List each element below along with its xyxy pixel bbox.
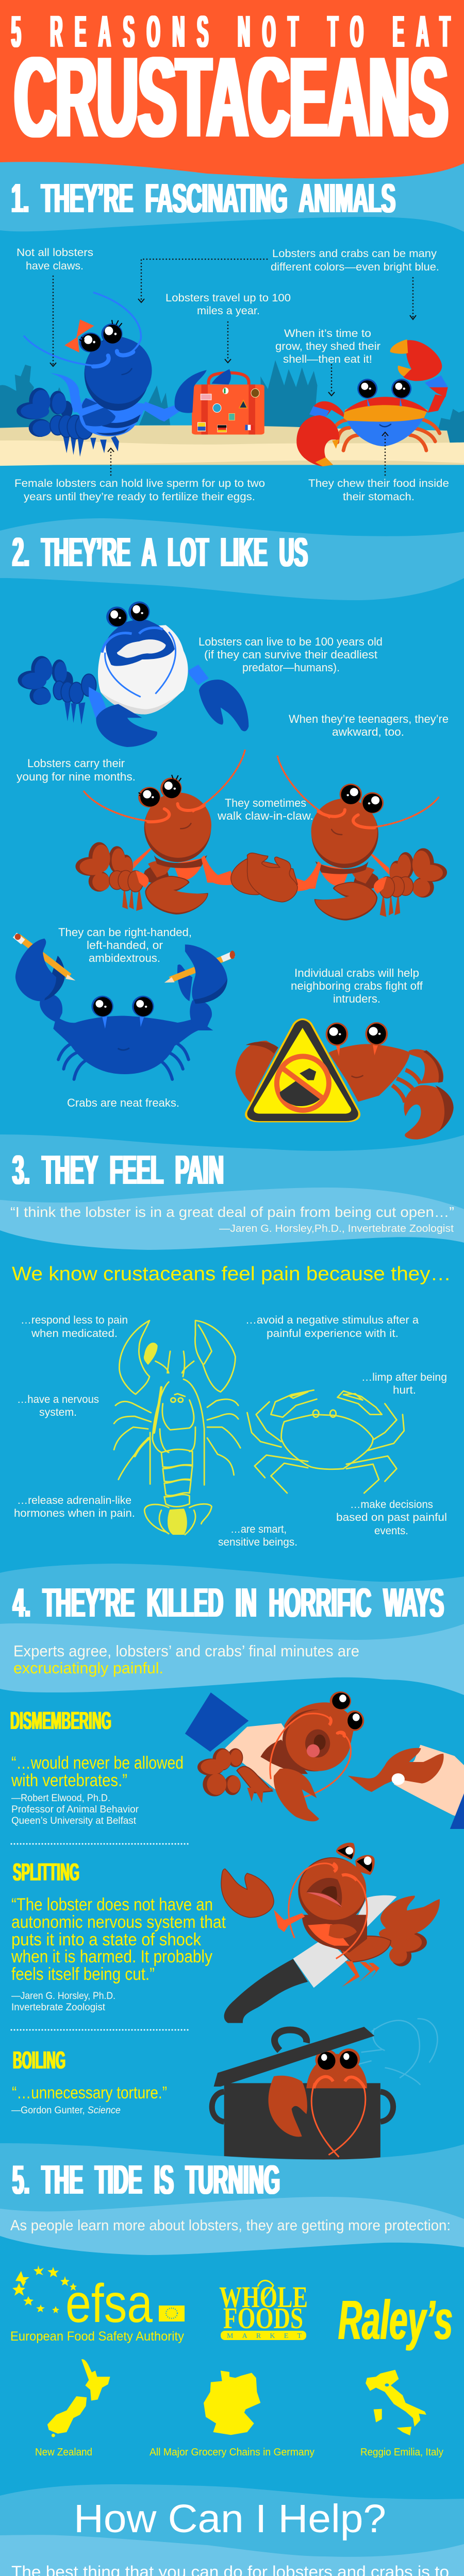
back sand (0, 426, 464, 465)
map labels (35, 2447, 443, 2458)
legs (392, 1070, 420, 1103)
map: Germany (204, 2370, 260, 2435)
text: individual crabs: intruders. (333, 992, 380, 1005)
legs (342, 1961, 379, 1987)
text: travel (165, 292, 291, 317)
dotted pointer: colors (138, 259, 267, 302)
lobster brow marks (314, 2077, 364, 2088)
body (302, 1915, 367, 1953)
quote: would never: “…would never be allowed (11, 1753, 184, 1773)
boiling pot pictogram (280, 1080, 321, 1106)
text: colors: Lobsters and crabs can be many (272, 248, 437, 260)
lobster head (306, 2054, 367, 2088)
left lobster eyes (138, 775, 182, 807)
eyes (330, 1691, 351, 1710)
shell (328, 1044, 410, 1101)
side tail piece (81, 398, 115, 426)
text: handed: left-handed, or (87, 939, 163, 952)
illustration: splitting a lobster (221, 1843, 440, 2023)
text: teenagers: awkward, too. (332, 725, 404, 738)
dotted pointer: shell (328, 365, 335, 396)
text: travel: miles a year. (197, 305, 260, 317)
front sand (0, 440, 464, 466)
maps (47, 2359, 426, 2437)
eyes (102, 1016, 144, 1029)
text: protection: As people learn more about lobsters, they are getting more protection: (10, 2217, 451, 2234)
left pencil (15, 934, 75, 980)
quote: autonomic: feels itself being cut.” (11, 1964, 155, 1984)
text: nervous system (17, 1394, 99, 1418)
quote: would never (11, 1753, 184, 1790)
left raised claw (221, 1869, 274, 1918)
lower claw (274, 1769, 319, 1821)
quote: Horsley: “I think the lobster is in a great deal of pain from being cut open…” (10, 1204, 454, 1220)
quote: autonomic: puts it into a state of shock (11, 1930, 202, 1950)
text: live to 100: predator—humans). (242, 661, 340, 674)
quote: would never: with vertebrates.” (11, 1771, 127, 1790)
efsa wordmark: efsa (65, 2273, 153, 2334)
legs (247, 1788, 274, 1803)
thumb highlight (392, 1773, 405, 1785)
text: claw in claw (217, 796, 313, 822)
text: individual crabs (291, 967, 423, 1005)
text: shedding (275, 328, 380, 365)
footer wave: pale (0, 2535, 464, 2576)
suitcase (192, 384, 264, 434)
eyes (336, 1843, 355, 1860)
legs (58, 1042, 189, 1079)
text: chew: They chew their food inside (308, 478, 449, 489)
right lobster eyes (340, 784, 384, 814)
text: decisions: …make decisions (350, 1499, 433, 1511)
logo: Whole Foods Market (219, 2280, 308, 2340)
smile (352, 1075, 363, 1077)
line drawing: lobster (114, 1320, 240, 1535)
warning sign (245, 1019, 360, 1122)
text: experts agree (13, 1642, 359, 1677)
claws (119, 1320, 150, 1394)
body (153, 1379, 204, 1485)
text: limp (361, 1371, 447, 1396)
pregnant / old blue lobster (18, 601, 248, 747)
segments (53, 674, 96, 704)
blue lobster with bow and suitcase (16, 292, 264, 457)
market: MARKET (227, 2332, 302, 2340)
wave band behind heading 3 (0, 1134, 464, 1226)
map: Italy (366, 2370, 426, 2435)
left arm (309, 401, 345, 419)
text: travel: Lobsters travel up to 100 (165, 292, 291, 304)
heading: how can I help: How Can I Help? (74, 2497, 386, 2541)
knife blade (293, 1937, 348, 1988)
claw lower right (404, 1085, 454, 1140)
small raised limb (51, 373, 83, 413)
antennae (105, 653, 141, 697)
map labels: Reggio Emilia, Italy (360, 2447, 443, 2458)
attribution: Elwood: —Robert Elwood, Ph.D. (11, 1793, 110, 1804)
text: experts agree: Experts agree, lobsters’ and crabs’ final minutes are (13, 1642, 359, 1660)
text: shedding: shell—then eat it! (283, 353, 372, 365)
whole: WHOLE (219, 2280, 308, 2314)
heading: boiling: BOILING (13, 2047, 65, 2074)
shell bands (96, 414, 141, 435)
stickers (198, 387, 259, 432)
head (284, 1702, 355, 1764)
eyes (326, 1023, 348, 1046)
quote: Horsley: —Jaren G. Horsley,Ph.D., Invertebrate Zoologist (219, 1223, 454, 1234)
shell (53, 1016, 213, 1074)
text: chew: their stomach. (343, 491, 415, 503)
right lobster (277, 756, 447, 921)
heading: dismembering: DISMEMBERING (10, 1707, 111, 1735)
coral left (0, 365, 71, 429)
text: carry young: Lobsters carry their (27, 757, 125, 770)
white mustache (117, 639, 166, 658)
title line: 5 reasons not to eat: 5 REASONS NOT TO EAT (11, 6, 450, 57)
crab legs (333, 419, 440, 450)
sleeve left (185, 1692, 248, 1752)
antennae and brows (270, 1714, 330, 1779)
lower shell (347, 418, 423, 446)
text: decisions (336, 1499, 447, 1537)
attribution: Gunter: —Gordon Gunter, Science (11, 2105, 121, 2116)
logo: EFSA (10, 2265, 185, 2344)
text: decisions: events. (374, 1525, 408, 1537)
text: medicated: …respond less to pain (21, 1314, 128, 1326)
divider dots 1 (11, 1843, 189, 1844)
pot handles (212, 2092, 224, 2122)
text: not all lobsters (16, 247, 93, 272)
left lobster (75, 750, 245, 914)
footer wave: how can I help (0, 2484, 464, 2576)
text: carry young (16, 757, 136, 783)
wave band behind heading 4 (0, 1564, 464, 1649)
right pencil (164, 951, 235, 982)
text: medicated: when medicated. (31, 1328, 118, 1340)
knife upper blade (358, 1895, 396, 1927)
yellow subheading: We know crustaceans feel pain because they… (12, 1263, 451, 1285)
smile (118, 1048, 129, 1050)
text: female lobsters: years until they’re ready to fertilize their eggs. (24, 491, 255, 503)
dotted pointer: bright blue (410, 278, 416, 319)
eye drips (335, 1042, 379, 1056)
pot body (224, 2083, 380, 2160)
quote: unnecessary torture: “…unnecessary torture.” (12, 2083, 167, 2102)
mouth (306, 1878, 342, 1907)
text: nervous system: system. (39, 1406, 77, 1418)
red crab with warning sign (235, 1019, 454, 1140)
lobster eyes (316, 2049, 338, 2071)
efsa full name: European Food Safety Authority (10, 2329, 184, 2344)
text: medicated (21, 1314, 128, 1340)
orange title banner (0, 0, 464, 179)
lid (214, 2027, 374, 2087)
attribution: Elwood: Queen’s University at Belfast (11, 1816, 137, 1826)
map labels: New Zealand (35, 2447, 92, 2458)
text: not all lobsters: have claws. (26, 260, 84, 272)
tail (161, 1449, 192, 1506)
text: live to 100: (if they can survive their deadliest (204, 648, 377, 661)
legs (247, 1402, 404, 1493)
dotted pointer: travel (225, 322, 231, 363)
orange shell (343, 402, 428, 421)
text: female lobsters (14, 478, 265, 503)
text: individual crabs: Individual crabs will help (294, 967, 419, 979)
eyes (79, 332, 102, 352)
tail fan highlights (21, 390, 67, 436)
gripping claw (175, 369, 231, 413)
text: individual crabs: neighboring crabs fight off (291, 979, 423, 992)
efsa flag stars (166, 2308, 177, 2318)
dotted pointer: stomach (382, 432, 388, 475)
text: chew (308, 478, 449, 503)
attribution: Horsley (11, 1991, 115, 2013)
pale wave behind experts text (0, 1623, 464, 1695)
severed claw (348, 1748, 444, 1792)
text: carry young: young for nine months. (16, 770, 136, 783)
shell (281, 1414, 373, 1469)
antenna loop (311, 2083, 366, 2157)
dotted pointer: sperm (108, 448, 114, 475)
claws (199, 680, 248, 731)
left claw back finger (44, 956, 65, 1001)
foods: FOODS (223, 2301, 303, 2335)
map labels: All Major Grocery Chains in Germany (150, 2447, 314, 2458)
panel: seafloor scene (0, 360, 464, 466)
text: handed: They can be right-handed, (58, 926, 192, 939)
bow (64, 319, 94, 352)
knife handle (224, 1959, 308, 2023)
tail body (339, 1936, 391, 1962)
text: nervous system: …have a nervous (17, 1394, 99, 1405)
text: adrenalin: …release adrenalin-like (17, 1495, 131, 1506)
dotted pointer: claws (50, 276, 56, 366)
suitcase handle (208, 373, 249, 385)
text: teenagers: When they’re teenagers, they’re (289, 713, 449, 725)
text: teenagers (289, 713, 449, 738)
text: smart (218, 1523, 297, 1548)
efsa flag (159, 2306, 185, 2321)
heading: splitting: SPLITTING (13, 1859, 79, 1886)
lobster couple walking claw in claw (75, 750, 447, 921)
legs (64, 702, 85, 725)
text: adrenalin (14, 1495, 135, 1519)
held claws (231, 859, 297, 895)
text: claw in claw: They sometimes (225, 796, 306, 809)
lower claw (296, 415, 339, 466)
tail fan (197, 1748, 243, 1797)
map: New Zealand (47, 2359, 110, 2437)
claw left (235, 1041, 278, 1104)
quote: Horsley (10, 1204, 454, 1234)
text: live to 100: Lobsters can live to be 100 years old (198, 635, 383, 648)
limb crossing (75, 402, 105, 416)
right hand (394, 1745, 464, 1819)
text: decisions: based on past painful (336, 1512, 447, 1523)
text: avoid stimulus: painful experience with it. (267, 1328, 399, 1340)
seaweed middle (260, 360, 318, 429)
quote: autonomic (11, 1895, 226, 1984)
tail segments (50, 415, 93, 439)
hand left (225, 1723, 296, 1789)
market pill (221, 2331, 306, 2340)
lobster back body (260, 1740, 308, 1774)
tail fan (390, 1931, 427, 1967)
eyelashes (79, 320, 122, 342)
text: handed: ambidextrous. (89, 952, 160, 964)
illustration: dismembering a lobster (185, 1691, 464, 1829)
heading 3: 3. THEY FEEL PAIN (12, 1147, 224, 1193)
pale wave behind quote (0, 1188, 464, 1250)
quote: autonomic: “The lobster does not have an (11, 1895, 213, 1914)
brows (117, 351, 133, 355)
right claw back finger (177, 964, 192, 1001)
attribution: Elwood (11, 1793, 139, 1826)
text: colors (271, 248, 439, 273)
divider dots 2 (11, 2029, 189, 2031)
text: colors: different colors—even bright blue. (271, 261, 439, 273)
illustration: boiling pot and lobster (212, 2019, 438, 2160)
red shell top (343, 397, 428, 413)
seaweed behind lobster (139, 385, 170, 425)
raised arm (428, 395, 445, 413)
text: smart: …are smart, (230, 1523, 287, 1535)
belly (98, 625, 188, 715)
crab smile (380, 424, 391, 427)
text: limp: …limp after being (361, 1371, 447, 1383)
left claw (15, 939, 56, 1001)
arms (89, 665, 209, 720)
lobster claw (269, 2076, 307, 2137)
red and blue crab (296, 340, 448, 466)
coral right (438, 409, 464, 443)
arms (274, 1910, 305, 1932)
swirl (258, 2280, 273, 2300)
quote: autonomic: autonomic nervous system that (11, 1912, 226, 1932)
raised claw (403, 340, 442, 381)
quote: autonomic: when it is harmed. It probably (11, 1947, 212, 1967)
legs (63, 436, 119, 457)
text: limp: hurt. (393, 1384, 416, 1396)
smile (122, 368, 132, 375)
text: avoid stimulus (245, 1314, 419, 1340)
mouth (305, 1730, 330, 1757)
text: shedding: When it’s time to (284, 328, 371, 340)
head (106, 619, 175, 666)
antennae (289, 1863, 335, 1938)
text: claw in claw: walk claw-in-claw. (217, 809, 313, 822)
text: avoid stimulus: …avoid a negative stimulus after a (245, 1314, 419, 1326)
text: smart: sensitive beings. (218, 1536, 297, 1548)
text: adrenalin: hormones when in pain. (14, 1507, 135, 1519)
wave band behind heading 1 (0, 0, 464, 232)
text: female lobsters: Female lobsters can hold live sperm for up to two (14, 478, 265, 489)
text: experts agree: excruciatingly painful. (13, 1659, 163, 1677)
tail segments (237, 1767, 272, 1793)
right claw (185, 944, 227, 1004)
arm (408, 1049, 443, 1083)
arm to suitcase (142, 402, 180, 421)
blue crab with pencils (15, 934, 235, 1079)
arm segments (40, 993, 62, 1023)
legs (114, 1399, 240, 1480)
attribution: Elwood: Professor of Animal Behavior (11, 1804, 139, 1815)
claws (271, 1390, 317, 1417)
pale wave behind protection text (0, 2197, 464, 2255)
carapace (85, 336, 150, 411)
tail fan (16, 388, 73, 437)
text: not all lobsters: Not all lobsters (16, 247, 93, 259)
text: handed (58, 926, 192, 964)
steam (358, 2019, 438, 2085)
eyes (106, 606, 127, 627)
lower body (79, 398, 144, 436)
attribution: Horsley: —Jaren G. Horsley, Ph.D. (11, 1991, 115, 2002)
wave band behind heading 5 (0, 2143, 464, 2226)
crab eyes (367, 398, 402, 406)
antennae (93, 292, 141, 354)
right claw (380, 1895, 440, 1936)
line drawing: crab (247, 1390, 404, 1493)
attribution: Horsley: Invertebrate Zoologist (11, 2002, 106, 2013)
tail fan (18, 656, 73, 705)
text: neat freaks: Crabs are neat freaks. (67, 1096, 179, 1109)
text: live to 100 (198, 635, 383, 674)
text: shedding: grow, they shed their (275, 341, 380, 352)
efsa stars (12, 2265, 77, 2313)
wave band behind heading 2 (0, 518, 464, 600)
